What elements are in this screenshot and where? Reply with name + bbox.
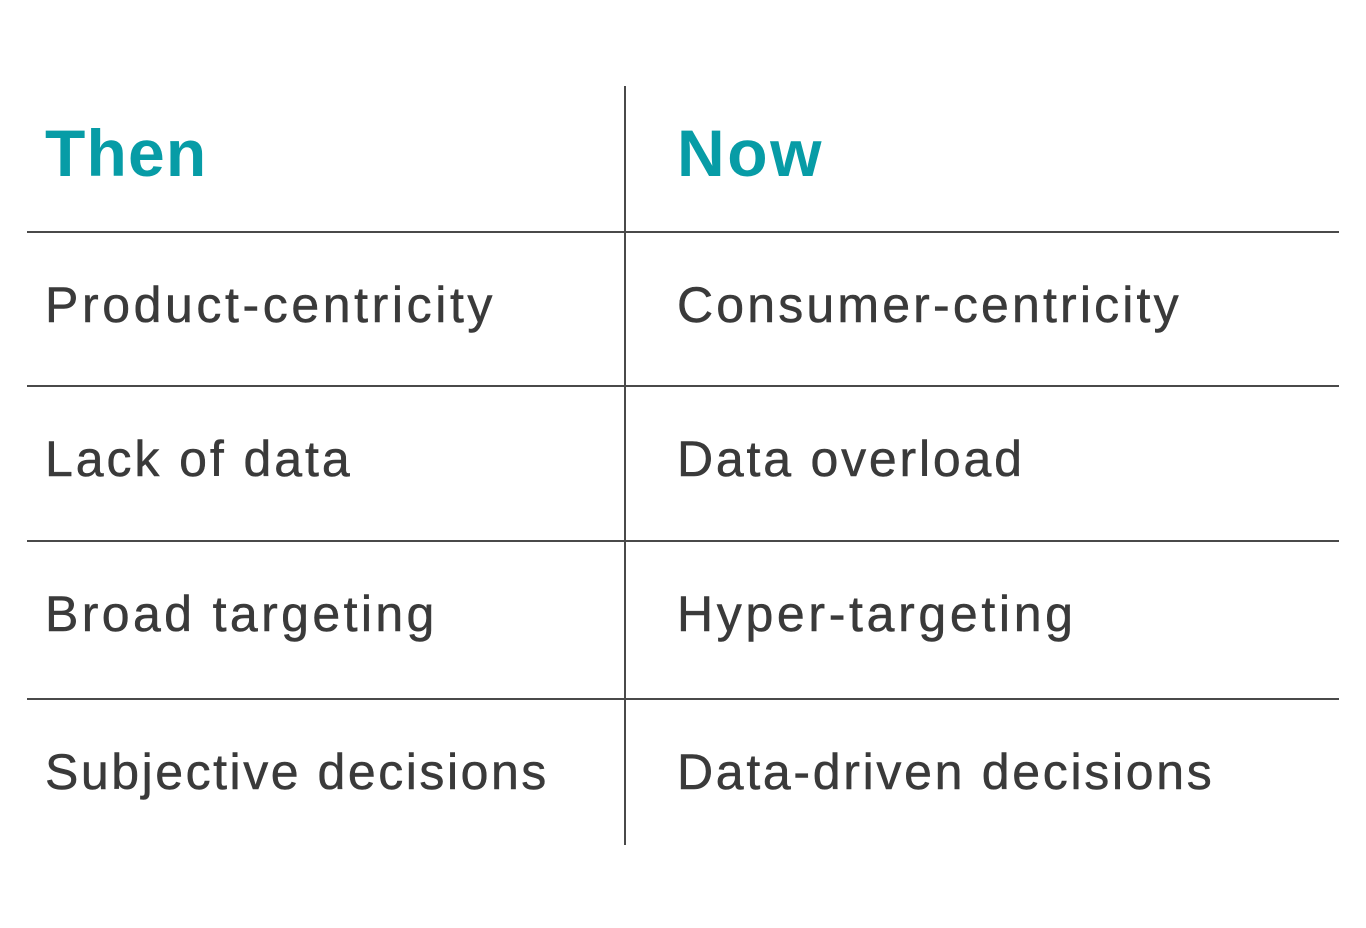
then row 2: Lack of data bbox=[45, 431, 353, 487]
header row divider bbox=[27, 231, 1339, 233]
row divider 1 bbox=[27, 385, 1339, 387]
vertical column divider bbox=[624, 86, 626, 845]
comparison table bbox=[27, 86, 1339, 845]
heading: Then: Then bbox=[45, 116, 207, 190]
then row 3: Broad targeting bbox=[45, 586, 438, 642]
now row 1: Consumer-centricity bbox=[677, 277, 1182, 333]
now row 2: Data overload bbox=[677, 431, 1025, 487]
then row 1: Product-centricity bbox=[45, 277, 496, 333]
now row 4: Data-driven decisions bbox=[677, 744, 1214, 800]
heading: Now: Now bbox=[677, 116, 824, 190]
then row 4: Subjective decisions bbox=[45, 744, 549, 800]
row divider 3 bbox=[27, 698, 1339, 700]
row divider 2 bbox=[27, 540, 1339, 542]
now row 3: Hyper-targeting bbox=[677, 586, 1077, 642]
